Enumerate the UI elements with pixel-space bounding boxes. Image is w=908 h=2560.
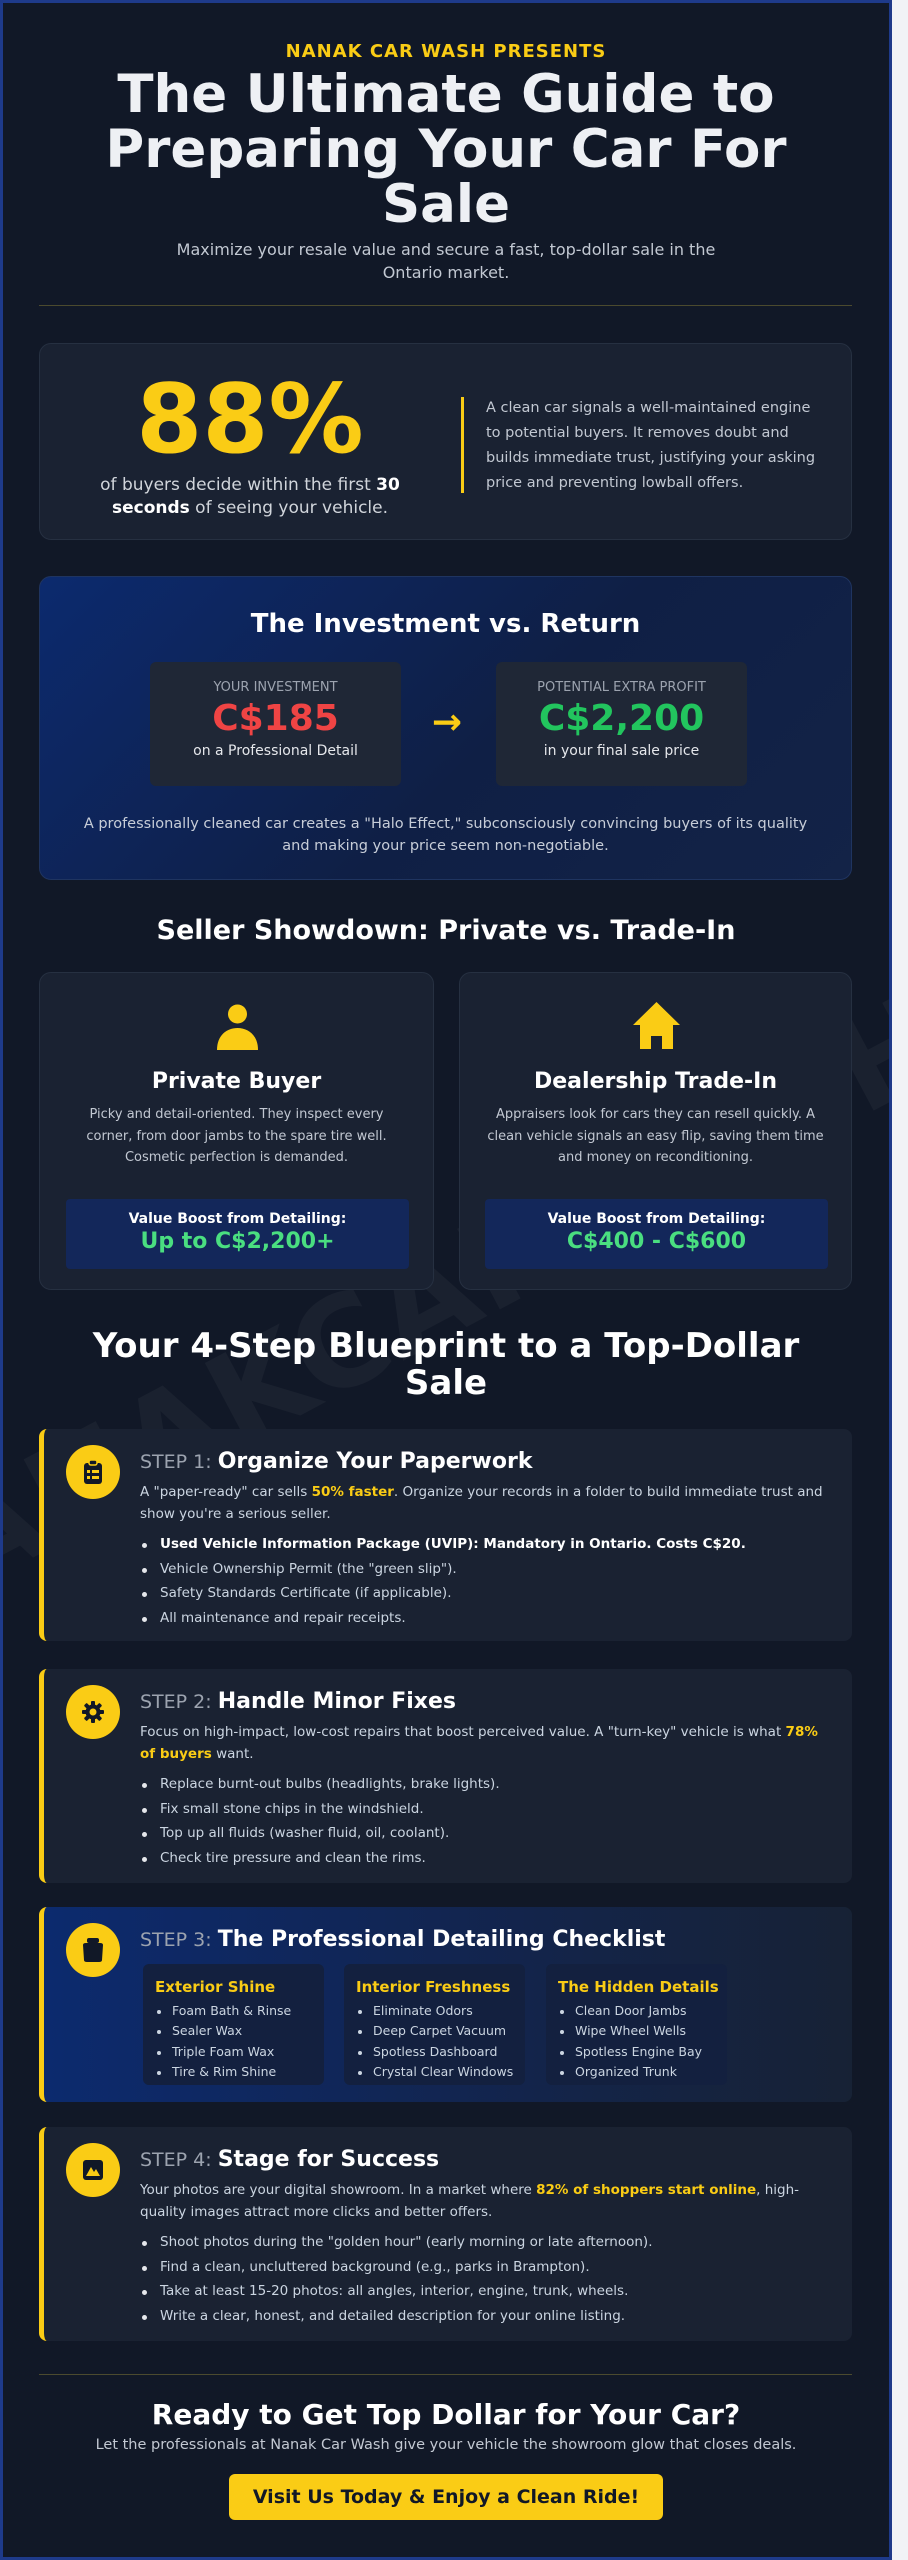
column: interior: Interior Freshness: [356, 1978, 510, 1996]
column: hidden: Spotless Engine Bay: [575, 2044, 702, 2059]
step 1: [39, 1429, 852, 1641]
icon: person: [217, 1004, 258, 1050]
CTA button: Visit Us Today & Enjoy a Clean Ride!: [253, 2486, 639, 2508]
column: exterior: Triple Foam Wax: [172, 2044, 274, 2059]
step list: Take at least 15-20 photos: all angles, interior, engine, trunk, wheels.: [160, 2283, 628, 2299]
value box: [66, 1199, 409, 1269]
CTA text: Let the professionals at Nanak Car Wash give your vehicle the showroom glow that closes deals.: [96, 2437, 796, 2453]
box: profit: POTENTIAL EXTRA PROFIT: [537, 680, 706, 695]
box: profit: in your final sale price: [544, 743, 699, 759]
step list: All maintenance and repair receipts.: [160, 1610, 406, 1626]
icon: house: [633, 1002, 680, 1049]
box: investment: [150, 662, 401, 786]
text: Appraisers look for cars they can resell quickly. A clean vehicle signals an easy flip, saving them time and money on reconditioning.: [487, 1107, 824, 1165]
column: exterior: [143, 1964, 324, 2085]
step list: Shoot photos during the "golden hour" (early morning or late afternoon).: [160, 2234, 652, 2250]
value box: Up to C$2,200+: [140, 1229, 335, 1254]
step list: Write a clear, honest, and detailed description for your online listing.: [160, 2308, 625, 2324]
step list: [142, 1776, 500, 1866]
box: profit: C$2,200: [539, 698, 704, 739]
step heading: STEP 3: The Professional Detailing Checklist: [140, 1927, 665, 1952]
subtitle: Maximize your resale value and secure a fast, top-dollar sale in the Ontario market.: [177, 240, 715, 282]
value box: [485, 1199, 828, 1269]
stat caption: of buyers decide within the first 30 seconds of seeing your vehicle.: [100, 475, 400, 518]
step list: Replace burnt-out bulbs (headlights, brake lights).: [160, 1776, 500, 1792]
step text: Your photos are your digital showroom. In a market where 82% of shoppers start online, high-quality images attract more clicks and better offers.: [140, 2182, 799, 2220]
column: hidden: Wipe Wheel Wells: [575, 2023, 686, 2038]
header kicker: NANAK CAR WASH PRESENTS: [286, 41, 606, 62]
step list: Vehicle Ownership Permit (the "green slip").: [160, 1560, 457, 1576]
big stat: 88%: [136, 365, 364, 475]
column: interior: Deep Carpet Vacuum: [373, 2023, 506, 2038]
step text: Focus on high-impact, low-cost repairs that boost perceived value. A "turn-key" vehicle is what 78% of buyers want.: [140, 1724, 818, 1762]
step list: Used Vehicle Information Package (UVIP): Mandatory in Ontario. Costs C$20.: [160, 1536, 746, 1552]
column: hidden: The Hidden Details: [558, 1978, 719, 1996]
column: exterior: Foam Bath & Rinse: [172, 2003, 291, 2018]
value box: C$400 - C$600: [567, 1229, 746, 1254]
panel: dealership trade-in: [459, 972, 852, 1290]
icon: gear: [66, 1685, 120, 1739]
title: Dealership Trade-In: [534, 1069, 777, 1094]
step heading: STEP 2: Handle Minor Fixes: [140, 1689, 456, 1714]
panel: private buyer: [39, 972, 434, 1290]
box: profit: [496, 662, 747, 786]
step list: Fix small stone chips in the windshield.: [160, 1800, 424, 1816]
box: investment: C$185: [212, 698, 339, 739]
panel: investment vs return: [39, 576, 852, 880]
step list: Top up all fluids (washer fluid, oil, coolant).: [160, 1825, 449, 1841]
column: hidden: Organized Trunk: [575, 2064, 677, 2079]
step heading: STEP 4: Stage for Success: [140, 2147, 439, 2172]
step heading: STEP 1: Organize Your Paperwork: [140, 1449, 532, 1474]
box: investment: on a Professional Detail: [193, 743, 358, 759]
arrow: →: [432, 702, 462, 743]
title: The Ultimate Guide to Preparing Your Car For Sale: [105, 64, 787, 235]
column: hidden: Clean Door Jambs: [575, 2003, 686, 2018]
step list: [142, 2234, 652, 2324]
step list: Check tire pressure and clean the rims.: [160, 1850, 426, 1866]
step 3: [39, 1907, 852, 2102]
column: interior: [344, 1964, 525, 2085]
icon: bucket: [66, 1923, 120, 1977]
column: interior: Crystal Clear Windows: [373, 2064, 513, 2079]
heading: seller showdown: Seller Showdown: Private vs. Trade-In: [157, 915, 735, 946]
column: exterior: Exterior Shine: [155, 1978, 275, 1996]
step list: Find a clean, uncluttered background (e.g., parks in Brampton).: [160, 2258, 590, 2274]
value box: Value Boost from Detailing:: [129, 1211, 346, 1227]
stat explanation: A clean car signals a well-maintained engine to potential buyers. It removes doubt and builds immediate trust, justifying your asking price and preventing lowball offers.: [486, 400, 815, 491]
column: interior: Eliminate Odors: [373, 2003, 473, 2018]
step list: [142, 1536, 746, 1626]
CTA heading: Ready to Get Top Dollar for Your Car?: [152, 2398, 740, 2431]
step text: A "paper-ready" car sells 50% faster. Organize your records in a folder to build immediate trust and show you're a serious seller.: [140, 1484, 823, 1522]
title: Private Buyer: [152, 1069, 321, 1094]
column: exterior: Tire & Rim Shine: [172, 2064, 276, 2079]
heading: The Investment vs. Return: [251, 609, 640, 639]
step 4: [39, 2127, 852, 2341]
box: investment: YOUR INVESTMENT: [213, 680, 338, 695]
value box: Value Boost from Detailing:: [548, 1211, 765, 1227]
text: Picky and detail-oriented. They inspect every corner, from door jambs to the spare tire well. Cosmetic perfection is demanded.: [86, 1107, 387, 1165]
step list: Safety Standards Certificate (if applicable).: [160, 1585, 451, 1601]
CTA button: [229, 2474, 663, 2520]
panel: 88% stat: [39, 343, 852, 540]
halo text: A professionally cleaned car creates a "Halo Effect," subconsciously convincing buyers of its quality and making your price seem non-negotiable.: [84, 816, 807, 854]
column: hidden: [546, 1964, 727, 2085]
icon: clipboard: [66, 1445, 120, 1499]
heading: blueprint: Your 4-Step Blueprint to a Top-Dollar Sale: [93, 1326, 799, 1403]
column: exterior: Sealer Wax: [172, 2023, 242, 2038]
icon: photo: [66, 2143, 120, 2197]
step 2: [39, 1669, 852, 1883]
column: interior: Spotless Dashboard: [373, 2044, 497, 2059]
